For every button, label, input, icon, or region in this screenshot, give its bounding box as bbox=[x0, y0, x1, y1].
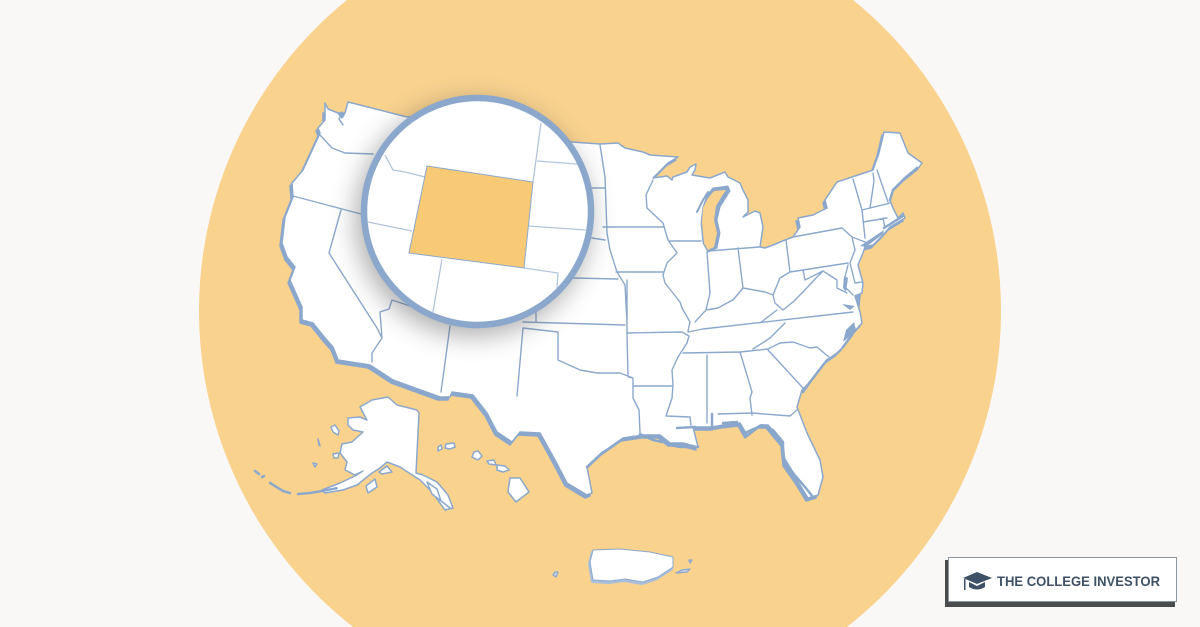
icon: graduation cap bbox=[963, 572, 992, 590]
Wyoming highlighted bbox=[409, 166, 533, 268]
Big Island bbox=[508, 478, 529, 502]
Puerto Rico main island bbox=[590, 549, 673, 582]
Puerto Rico shadow bbox=[589, 551, 672, 584]
mainland coast shadow bbox=[280, 113, 918, 501]
logo text: THE COLLEGE INVESTOR bbox=[997, 573, 1160, 589]
zoomed state borders bbox=[368, 123, 586, 312]
magnifying lens shadow bbox=[356, 102, 590, 336]
Alaska islands bbox=[313, 425, 450, 508]
logo shadow bbox=[945, 560, 1175, 607]
map of the United States bbox=[255, 102, 922, 584]
Lake Michigan water bbox=[702, 190, 726, 250]
logo box bbox=[948, 558, 1176, 602]
lens face and ring bbox=[364, 98, 591, 325]
Long Island and bays bbox=[842, 230, 884, 342]
Aleutian islands bbox=[255, 471, 338, 494]
orange background circle bbox=[199, 0, 1001, 627]
mainland white landmass bbox=[282, 102, 922, 498]
Alaska mainland bbox=[322, 397, 453, 510]
jagged coastline detail bbox=[587, 168, 917, 497]
magnifying lens bbox=[364, 98, 591, 325]
Puerto Rico bbox=[553, 549, 692, 584]
Lake Michigan bbox=[701, 186, 730, 252]
Alaska bbox=[255, 397, 453, 510]
state borders bbox=[293, 135, 890, 433]
nearby islets bbox=[553, 560, 692, 577]
Green Bay bbox=[697, 192, 708, 212]
logo badge bbox=[945, 558, 1176, 607]
Hawaii bbox=[438, 443, 529, 502]
smaller islands bbox=[438, 443, 509, 472]
Puget Sound inlet bbox=[339, 112, 343, 125]
